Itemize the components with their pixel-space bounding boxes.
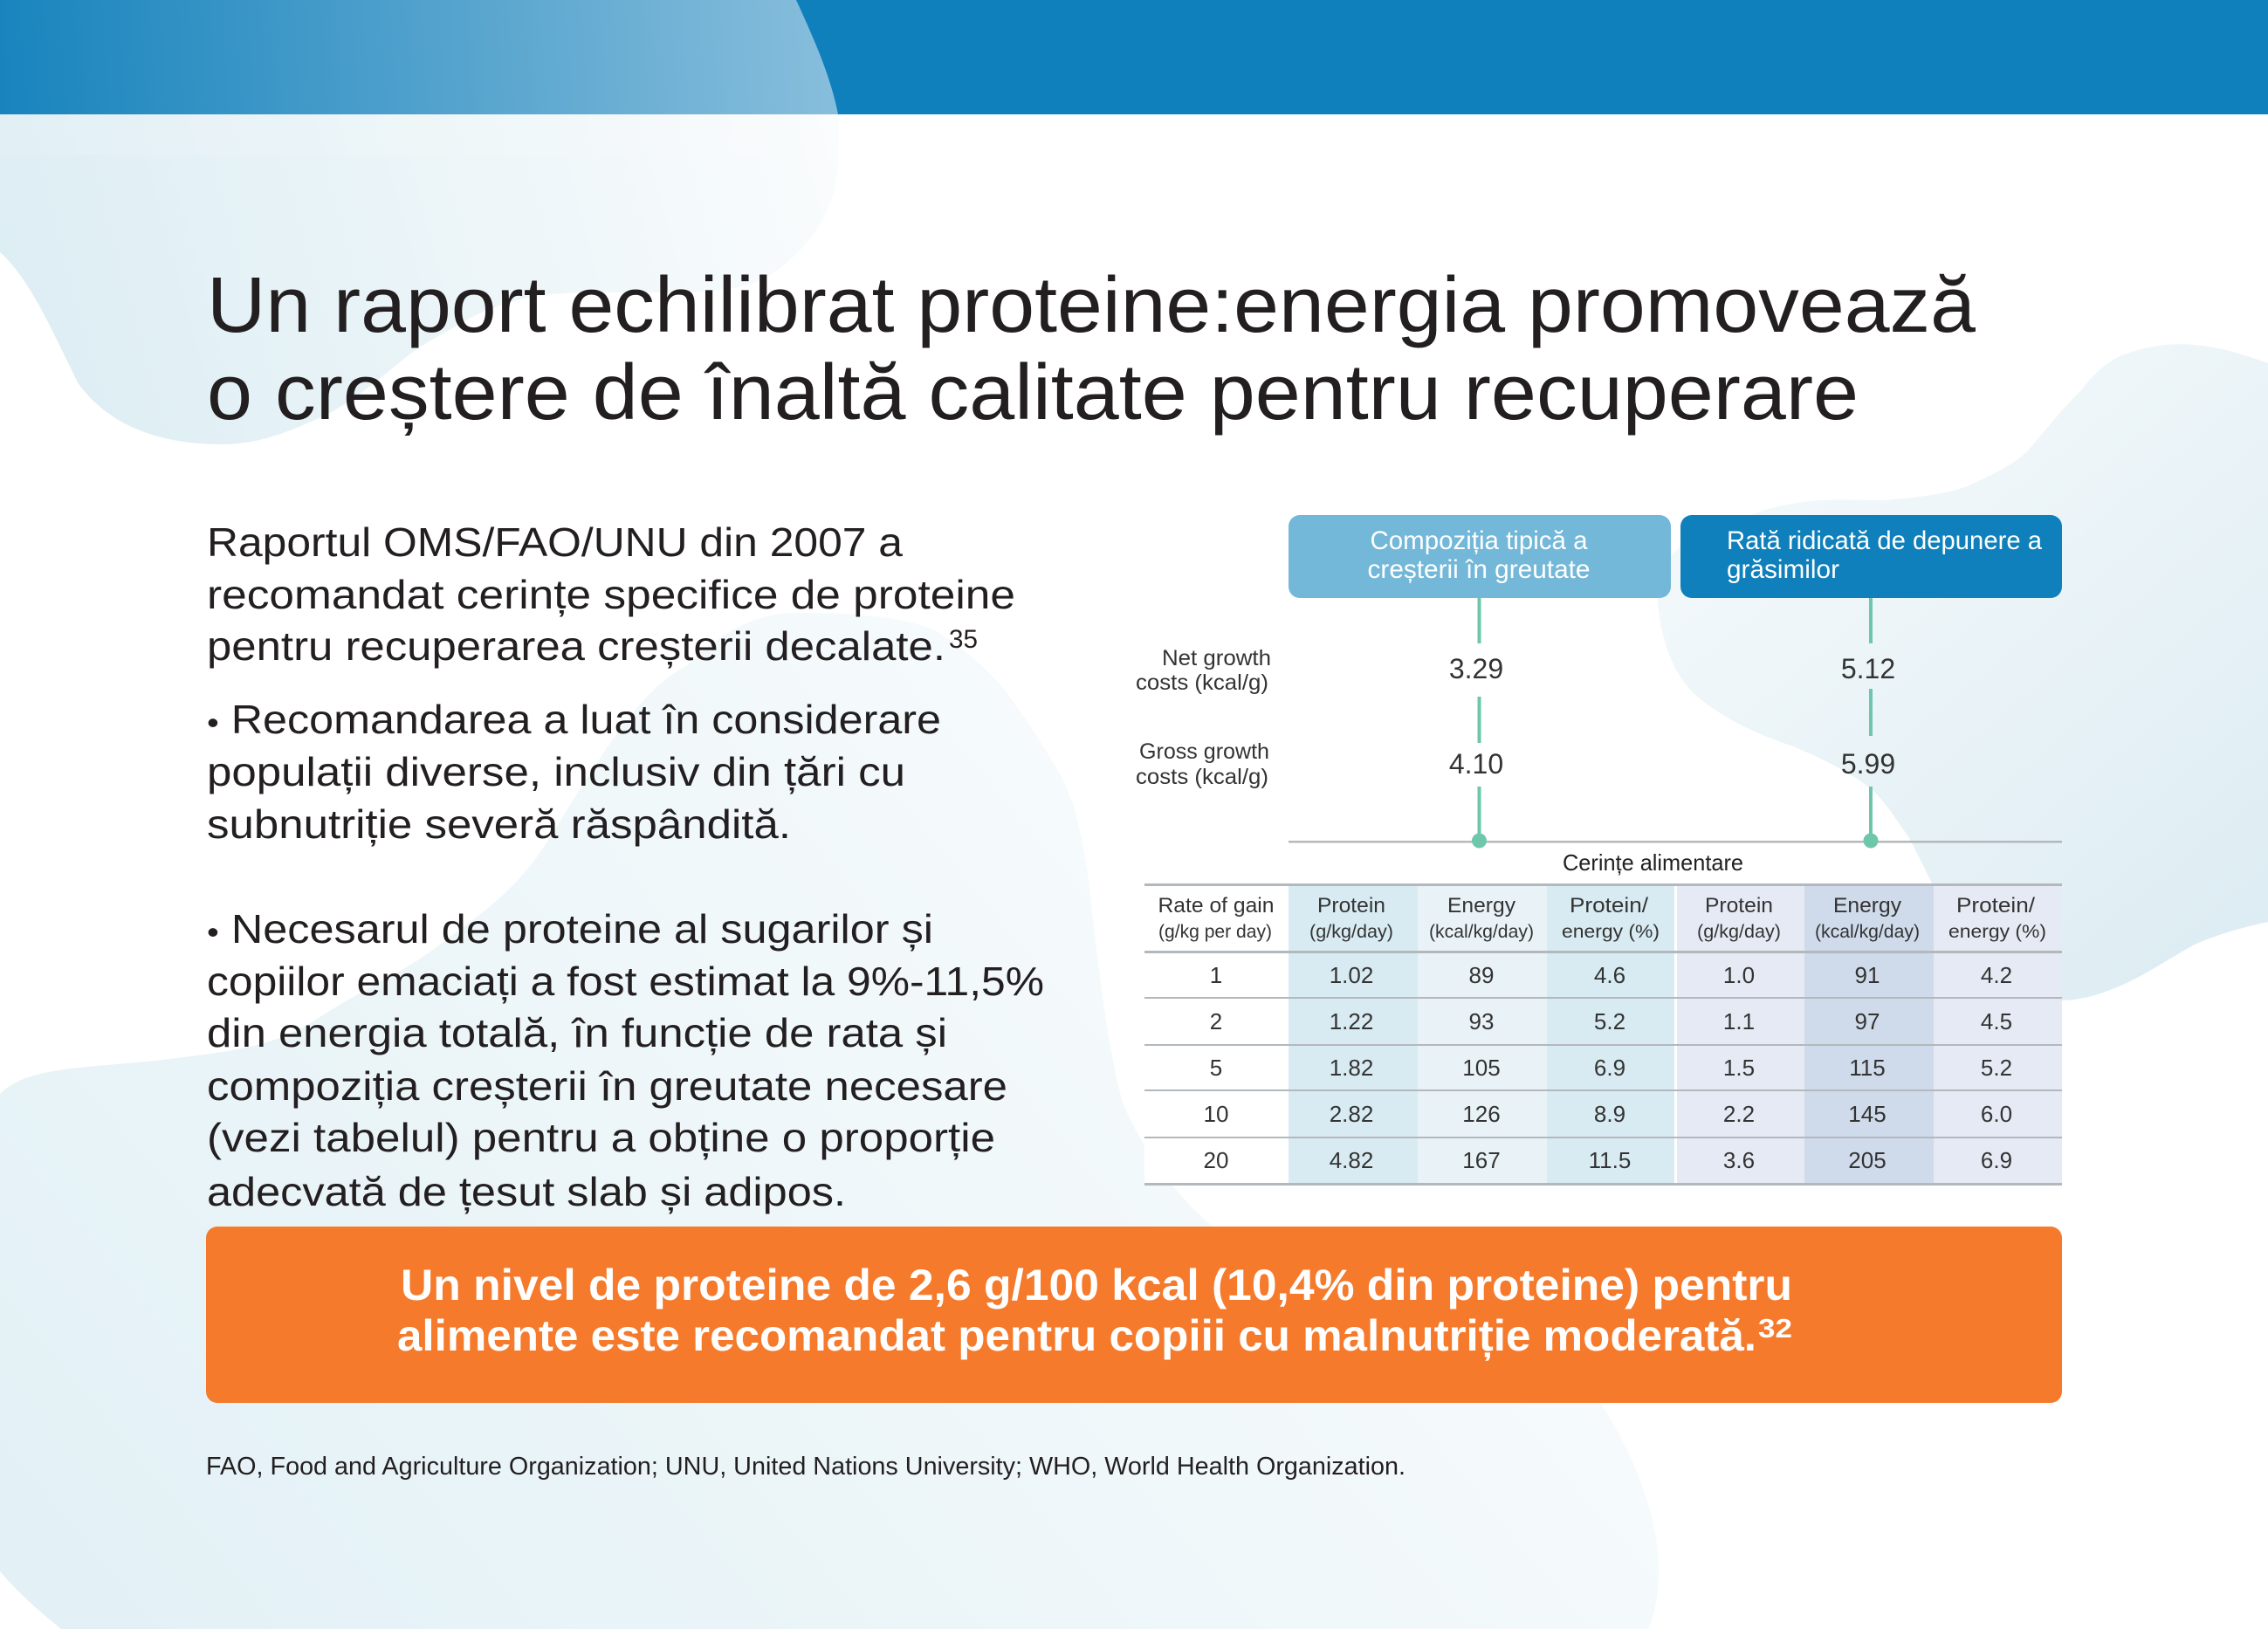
row: 2: 1.1 <box>1723 1008 1755 1034</box>
text block: bullet 2: • Necesarul de proteine al sugarilor și <box>207 906 933 952</box>
column headers: (g/kg/day) <box>1309 922 1393 942</box>
row: 10: 10 <box>1204 1101 1228 1127</box>
text block: intro <box>207 519 1015 669</box>
row: 1: 1.02 <box>1330 962 1373 988</box>
row: 20 <box>1204 1147 2012 1173</box>
flow diagram: growth costs <box>1136 515 2062 849</box>
column fills <box>1144 884 2062 1184</box>
title: o creștere de înaltă calitate pentru recuperare <box>207 349 1859 436</box>
row label: net growth <box>1136 646 1271 695</box>
row: 1: 1 <box>1210 962 1222 988</box>
column headers <box>1158 894 2046 942</box>
row: 2: 2 <box>1210 1008 1222 1034</box>
row: 10: 126 <box>1462 1101 1501 1127</box>
table heading: Cerințe alimentare <box>1563 849 1743 876</box>
column headers: Protein/ <box>1570 894 1648 918</box>
row: 1 <box>1210 962 2012 988</box>
callout: protein recommendation: Un nivel de proteine de 2,6 g/100 kcal (10,4% din proteine) pentru <box>401 1261 1792 1309</box>
row: 5: 115 <box>1849 1055 1886 1081</box>
row: 2: 97 <box>1855 1008 1880 1034</box>
column headers: energy (%) <box>1562 922 1660 942</box>
text block: bullet 2 <box>207 906 1044 1214</box>
row: 2: 93 <box>1469 1008 1494 1034</box>
column headers: energy (%) <box>1948 922 2046 942</box>
connector: typical composition <box>1472 598 1487 849</box>
values: 5.99 <box>1841 748 1895 780</box>
row label: gross growth: costs (kcal/g) <box>1136 765 1268 789</box>
text block: bullet 2: copiilor emaciați a fost estimat la 9%-11,5% <box>207 959 1044 1004</box>
row label: net growth: Net growth <box>1162 646 1271 670</box>
row label: net growth: costs (kcal/g) <box>1136 670 1268 695</box>
callout: protein recommendation: alimente este recomandat pentru copiii cu malnutriție moderată. <box>397 1311 1756 1360</box>
callout: protein recommendation: 32 <box>1758 1313 1792 1344</box>
row lines <box>1144 883 2062 1186</box>
text block: bullet 2: adecvată de țesut slab și adipos. <box>207 1169 846 1214</box>
column headers: (g/kg per day) <box>1158 922 1272 942</box>
row: 20: 4.82 <box>1330 1147 1373 1173</box>
text block: bullet 2: (vezi tabelul) pentru a obține o proporție <box>207 1115 995 1160</box>
text block: bullet 1: • Recomandarea a luat în considerare <box>207 697 941 742</box>
row: 2 <box>1210 1008 2012 1034</box>
column headers: Protein <box>1705 894 1773 918</box>
row: 20: 11.5 <box>1589 1147 1631 1173</box>
row: 5: 6.9 <box>1594 1055 1625 1081</box>
text block: intro: pentru recuperarea creșterii decalate. <box>207 623 945 669</box>
values: 3.29 <box>1449 653 1503 684</box>
column headers: Energy <box>1447 894 1515 918</box>
row: 10 <box>1204 1101 2012 1127</box>
text block: bullet 1: subnutriție severă răspândită. <box>207 801 791 847</box>
footnote: FAO, Food and Agriculture Organization; UNU, United Nations University; WHO, World Health Organization. <box>206 1453 1405 1481</box>
table: dietary requirements <box>1144 883 2062 1186</box>
row: 20: 205 <box>1848 1147 1887 1173</box>
column headers: (kcal/kg/day) <box>1815 922 1920 942</box>
blob: right <box>1657 344 2268 1000</box>
text block: intro: recomandat cerințe specifice de proteine <box>207 572 1015 617</box>
header box: high fat deposition: grăsimilor <box>1727 555 1839 584</box>
blob: top left over band <box>0 0 838 114</box>
blob: large bottom <box>0 613 1659 1629</box>
connector: high fat deposition <box>1863 598 1879 849</box>
header band <box>0 0 2268 114</box>
values: 5.12 <box>1841 653 1895 684</box>
header box: typical composition <box>1289 515 1671 598</box>
text block: intro: Raportul OMS/FAO/UNU din 2007 a <box>207 519 903 565</box>
column headers: Protein <box>1317 894 1385 918</box>
row: 20: 20 <box>1204 1147 1228 1173</box>
column headers: (g/kg/day) <box>1697 922 1781 942</box>
header box: typical composition: creșterii în greutate <box>1367 555 1591 584</box>
text block: bullet 2: compoziția creșterii în greutate necesare <box>207 1063 1007 1109</box>
row: 5: 1.5 <box>1723 1055 1755 1081</box>
row label: gross growth <box>1136 739 1269 789</box>
row: 5 <box>1210 1055 2012 1081</box>
row: 1: 89 <box>1469 962 1494 988</box>
row: 1: 4.6 <box>1594 962 1625 988</box>
row label: gross growth: Gross growth <box>1139 739 1269 764</box>
text block: bullet 2: din energia totală, în funcție de rata și <box>207 1010 947 1055</box>
axis line <box>1289 841 2062 843</box>
row: 20: 3.6 <box>1723 1147 1755 1173</box>
row: 10: 6.0 <box>1981 1101 2012 1127</box>
header box: high fat deposition: Rată ridicată de depunere a <box>1727 526 2042 555</box>
row: 20: 6.9 <box>1981 1147 2012 1173</box>
row: 5: 105 <box>1462 1055 1501 1081</box>
header box: typical composition: Compoziția tipică a <box>1371 526 1588 555</box>
row: 10: 2.2 <box>1723 1101 1755 1127</box>
row: 2: 4.5 <box>1981 1008 2012 1034</box>
row: 1: 4.2 <box>1981 962 2012 988</box>
row: 5: 1.82 <box>1330 1055 1373 1081</box>
row: 1: 91 <box>1855 962 1880 988</box>
column headers: Energy <box>1833 894 1901 918</box>
blob: top left below band <box>0 114 839 444</box>
header box: high fat deposition <box>1680 515 2062 598</box>
title: Un raport echilibrat proteine:energia promovează <box>207 262 1976 349</box>
values <box>1449 653 1895 780</box>
row: 10: 2.82 <box>1330 1101 1373 1127</box>
row: 10: 145 <box>1848 1101 1887 1127</box>
column headers: (kcal/kg/day) <box>1429 922 1534 942</box>
row: 1: 1.0 <box>1723 962 1755 988</box>
column headers: Rate of gain <box>1158 894 1275 918</box>
row: 10: 8.9 <box>1594 1101 1625 1127</box>
text block: bullet 1 <box>207 697 941 847</box>
callout: protein recommendation <box>206 1227 2062 1403</box>
row: 2: 5.2 <box>1594 1008 1625 1034</box>
row: 2: 1.22 <box>1330 1008 1373 1034</box>
title <box>207 262 1976 436</box>
row: 20: 167 <box>1462 1147 1501 1173</box>
row: 5: 5 <box>1210 1055 1222 1081</box>
text block: bullet 1: populații diverse, inclusiv din țări cu <box>207 749 905 794</box>
text block: intro: 35 <box>949 625 978 654</box>
values: 4.10 <box>1449 748 1503 780</box>
column headers: Protein/ <box>1956 894 2035 918</box>
row: 5: 5.2 <box>1981 1055 2012 1081</box>
